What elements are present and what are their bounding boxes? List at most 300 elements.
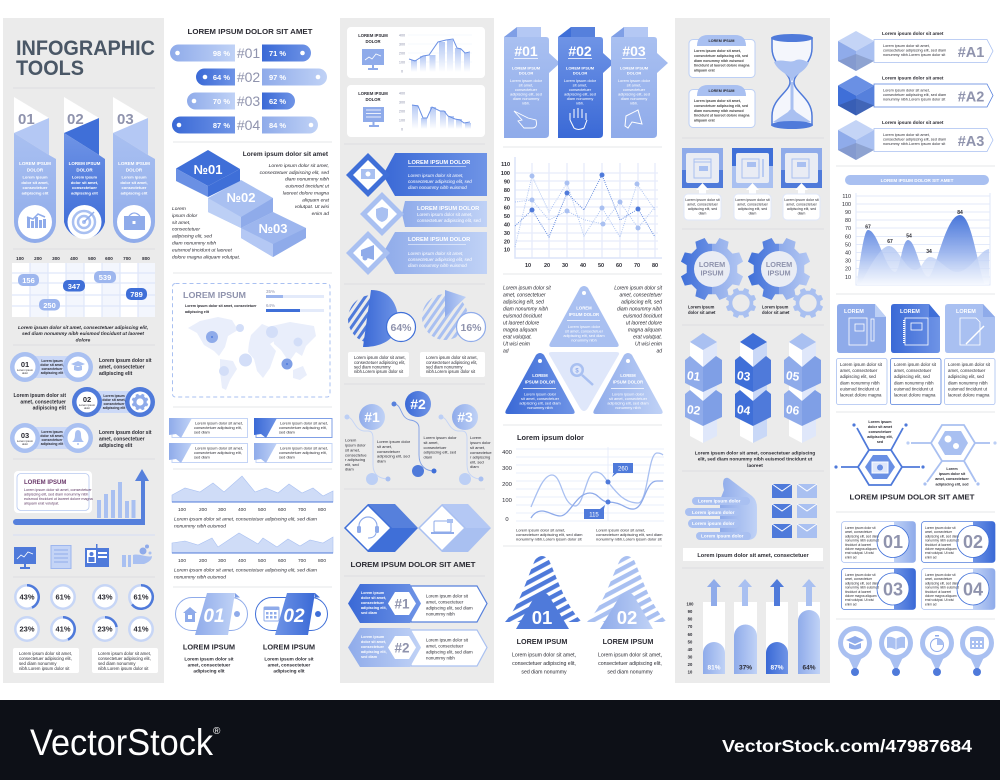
number card 01: enim ad — [845, 555, 857, 559]
panel: growth bar chart with note: adipiscing elit, sed diam nonummy nibh — [24, 492, 88, 496]
hand with list — [685, 478, 757, 540]
panel: numbered process rows: dolor — [84, 406, 90, 410]
panel: isometric steps: №01 — [194, 162, 222, 177]
panel: growth bar chart with note: Lorem ipsum dolor sit amet, consectetuer — [24, 488, 92, 492]
panel: isometric steps: euismod tincidunt ut laoreet — [172, 247, 232, 253]
ribbon card #03: adipiscing elit, sed — [618, 92, 650, 96]
striped peak 02: consectetuer adipiscing elit, — [598, 661, 662, 667]
flag card: Lorem ipsum dolor sit amet, — [195, 420, 243, 426]
line chart: curves: 115 — [589, 512, 599, 518]
panel: isometric steps: consectetuer adipiscing elit, sed — [260, 170, 329, 176]
panel: #1 #2 #3 connectors: ipsum dolor — [345, 442, 366, 448]
flag card: consectetuer adipiscing elit, — [194, 425, 242, 430]
tabbed note 1: consectetuer adipiscing elit, sed — [694, 54, 748, 58]
badge 02: adipiscing elit — [273, 668, 305, 674]
donut percent charts: 23% — [97, 624, 113, 634]
area chart 1: 800 — [318, 507, 326, 513]
file card 2 — [891, 304, 940, 353]
panel: triangle group: adipiscing elit, sed — [503, 300, 544, 306]
icon card with note 2: diam — [749, 212, 756, 216]
panel: line chart card 1: LOREM IPSUM — [358, 33, 388, 38]
panel: #1 #2 #3 connectors: consectetue — [470, 450, 492, 455]
ribbon card #01: nibh. — [522, 100, 530, 106]
banner 01 — [14, 97, 56, 243]
panel: triangle group: adipiscing elit, sed — [621, 300, 662, 306]
text box: adipiscing elit, sed — [894, 374, 930, 379]
line chart: curves — [502, 433, 664, 542]
cube row A1 — [838, 31, 993, 71]
number card 02: adipiscing elit, sed diam — [925, 534, 959, 538]
ribbon card #02: nibh. — [576, 100, 584, 106]
pie chart 16%: 16% — [460, 322, 482, 334]
chart: grid with value tags: 347 — [68, 282, 80, 291]
panel: #1 #2 #3 connectors: consectetuer — [424, 445, 447, 450]
banner 03: LOREM IPSUM — [118, 161, 150, 166]
stacked pillar 03-04: 04 — [736, 402, 752, 418]
panel: triangle group: sit amet, consectetuer — [565, 328, 604, 334]
panel: numbered process rows: 02 — [83, 395, 91, 404]
striped peak 01: Lorem ipsum dolor sit amet, — [512, 652, 576, 658]
dotted scatter chart: 100 — [501, 171, 510, 177]
panel: line chart card 1: 300 — [399, 42, 405, 46]
panel: triangle group: IPSUM DOLOR — [613, 380, 644, 384]
striped peak 02: sed diam nonummy — [607, 670, 653, 676]
banner 03: dolor sit amet, — [120, 180, 148, 185]
flag card — [169, 418, 248, 438]
panel: world map — [172, 284, 330, 397]
hexagon row #1: sed diam — [361, 611, 378, 615]
banner 01: Lorem ipsum — [22, 174, 48, 180]
area chart: overlapping peaks: 30 — [845, 258, 851, 264]
panel: triangle group: nonummy nibh — [615, 405, 641, 410]
panel: growth bar chart with note — [13, 469, 149, 525]
text card: sed diam nonummy — [426, 364, 463, 370]
panel: line chart card 1: 100 — [399, 60, 405, 64]
panel: triangle group: Lorem ipsum dolor — [568, 324, 600, 329]
panel: diamond list row 3: LOREM IPSUM DOLOR — [408, 237, 470, 243]
icon pin: book — [879, 626, 913, 676]
banner 01: adipiscing elit — [22, 190, 49, 196]
banner 02: DOLOR — [76, 168, 93, 172]
chart: grid with value tags: 100 — [16, 256, 24, 261]
badge 01: LOREM IPSUM — [183, 642, 235, 652]
area chart 2: 200 — [199, 558, 207, 564]
panel: triangle group: amet, consectetuer — [503, 292, 546, 298]
bar chart with arrows: 87% — [770, 664, 784, 672]
icon card with note 2 — [732, 148, 773, 220]
panel: numbered process rows: Lorem ipsum dolor sit — [99, 358, 152, 364]
cube row A1: Lorem ipsum dolor sit amet — [882, 31, 944, 36]
area chart 2: 800 — [318, 558, 326, 564]
ribbon card #02: consectetuer — [569, 87, 592, 92]
hand with list: Lorem ipsum dolor — [692, 510, 735, 515]
panel: numbered process rows: adipiscing elit — [99, 371, 133, 377]
hexagon node dark — [834, 420, 925, 485]
icon row: monitor, document, id card, hand — [14, 544, 152, 569]
hexagon row #1 — [348, 584, 487, 623]
area chart: overlapping peaks: 10 — [845, 275, 851, 281]
text card: sed diam nonummy — [98, 661, 136, 666]
cube row A2: nonummy nibh.Lorem ipsum dolor sit — [883, 98, 946, 102]
panel: numbered process rows: dolor sit amet, — [102, 398, 126, 402]
panel: triangle group: Lorem ipsum dolor — [524, 392, 556, 396]
caption: Lorem ipsum dolor sit amet, consectetuer adipiscing — [695, 452, 815, 456]
area chart: overlapping peaks: 67 — [865, 224, 871, 230]
flag card: sed diam — [279, 430, 295, 434]
ribbon card #03: DOLOR — [627, 70, 641, 76]
panel: numbered process rows: Lorem ipsum — [103, 394, 125, 398]
donut percent charts: 23% — [19, 624, 35, 634]
line chart: curves: 100 — [502, 498, 512, 504]
panel: world map: adipiscing elit — [185, 310, 210, 314]
hexagon node light: amet, consectetuer — [935, 477, 969, 481]
panel: isometric steps: ipsum dolor — [172, 213, 198, 219]
panel: isometric steps: №02 — [227, 190, 255, 205]
number card 04: enim ad — [925, 602, 937, 606]
caption: Lorem ipsum dolor sit amet, consectetuer adipiscing elit, — [18, 326, 148, 331]
panel: #1 #2 #3 connectors: ipsum dolor — [470, 440, 491, 445]
ribbon card #03: LOREM IPSUM — [620, 66, 648, 70]
area chart: overlapping peaks: 40 — [845, 250, 851, 256]
panel: growth bar chart with note: LOREM IPSUM — [24, 480, 66, 486]
panel: line chart card 2: 0 — [401, 128, 403, 132]
cube row A3: consectetuer adipiscing elit, sed diam — [883, 138, 946, 142]
heading: LOREM IPSUM DOLOR SIT AMET — [850, 492, 975, 502]
panel: isometric steps: enim ad — [312, 211, 329, 217]
panel: #1 #2 #3 connectors: elit, sed — [345, 462, 359, 467]
text box: euismod tincidunt ut — [894, 386, 934, 392]
tabbed note 2: aliquam erat — [694, 118, 715, 122]
line chart: curves: 300 — [502, 466, 512, 472]
text box: adipiscing elit, sed — [948, 374, 984, 379]
panel: double sided percent pills: 70 % — [213, 97, 230, 106]
flag card — [254, 443, 332, 463]
bar chart with arrows — [686, 579, 820, 674]
banner 02: LOREM IPSUM — [69, 161, 100, 166]
striped peak 02 — [587, 556, 667, 676]
panel: double sided percent pills — [170, 44, 327, 134]
area chart 1: 100 — [178, 507, 186, 513]
ribbon card #02: LOREM IPSUM — [566, 66, 594, 70]
panel: numbered process rows — [10, 352, 155, 453]
tabbed note 2: diam nonummy nibh euismod — [694, 109, 744, 113]
ribbon card #03: Lorem ipsum dolor — [618, 78, 650, 83]
panel: line chart card 2 — [347, 85, 485, 137]
bar chart with arrows: 60 — [688, 632, 693, 637]
ribbon card #02: DOLOR — [573, 70, 587, 76]
area chart 1: Lorem ipsum dolor sit amet, consectetuer adipiscing elit, sed diam — [174, 518, 317, 522]
number card 04: nonummy nibh euismod — [925, 586, 959, 590]
bar chart with arrows: 80 — [688, 616, 693, 622]
text card: sed diam nonummy — [19, 661, 57, 666]
hexagon node dark: consectetuer — [869, 430, 892, 434]
area chart 2 — [172, 533, 333, 580]
number card 04: amet, consectetuer — [925, 577, 953, 581]
panel: triangle group: Lorem ipsum dolor — [612, 392, 644, 396]
tabbed note 1: aliquam erat — [694, 68, 715, 72]
ribbon card #01: #01 — [514, 43, 538, 59]
chart: grid with value tags: 700 — [123, 256, 131, 261]
text box: laoreet dolore magna — [894, 392, 936, 398]
stacked pillar 05-06: 05 — [785, 368, 801, 384]
panel: triangle group: $ — [575, 368, 579, 374]
text box: diam nonummy nibh — [894, 380, 934, 386]
number card 03: dolore magna aliquam — [845, 594, 877, 598]
pill heading: LOREM IPSUM DOLOR SIT AMET — [881, 178, 954, 183]
panel: #1 #2 #3 connectors: diam — [424, 454, 433, 460]
cube row A3: nonummy nibh.Lorem ipsum dolor sit — [883, 142, 946, 146]
panel: isometric steps: consectetuer — [172, 227, 200, 233]
panel: numbered process rows: consectetuer — [41, 438, 63, 442]
cube row A2: Lorem ipsum dolor sit amet, — [883, 88, 930, 92]
dotted scatter chart: 40 — [580, 263, 586, 269]
panel: #1 #2 #3 connectors: sit amet, — [470, 445, 485, 450]
gears 2: IPSUM — [767, 268, 791, 278]
hexagon row #2: sed diam — [361, 655, 378, 659]
number card 04: adipiscing elit, sed diam — [925, 581, 959, 585]
flag card: Lorem ipsum dolor sit amet, — [280, 446, 328, 450]
area chart: overlapping peaks: 60 — [845, 234, 851, 240]
hexagon node dark: Lorem ipsum — [868, 420, 892, 424]
ribbon card #01: DOLOR — [519, 70, 533, 76]
text box — [944, 358, 995, 404]
area chart: overlapping peaks: 84 — [957, 210, 963, 216]
text card: consectetuer adipiscing elit, — [354, 360, 405, 365]
panel: world map: LOREM IPSUM — [183, 290, 246, 300]
line chart: curves: 200 — [502, 482, 512, 488]
panel: triangle group: IPSUM DOLOR — [569, 312, 600, 317]
dotted scatter chart: 40 — [504, 222, 510, 228]
panel: triangle group: Ut wisi enim — [635, 342, 662, 348]
line chart: curves: Lorem ipsum dolor sit amet, — [516, 528, 565, 532]
panel: #1 #2 #3 connectors: sit amet, — [424, 440, 439, 445]
number card 02: dolore magna aliquam — [925, 547, 957, 551]
ribbon card #01: adipiscing elit, sed — [510, 92, 542, 96]
bar chart with arrows: 64% — [802, 664, 816, 672]
ribbon card #03: consectetuer — [623, 87, 646, 92]
panel: double sided percent pills: #04 — [237, 117, 260, 133]
cube row A2 — [838, 76, 993, 116]
text box: diam nonummy nibh — [840, 380, 880, 386]
chart: grid with value tags: 300 — [52, 256, 60, 261]
flag card: consectetuer adipiscing elit, — [279, 450, 327, 455]
panel: triangle group: ad — [656, 348, 662, 354]
banner 02: adipiscing elit — [71, 190, 99, 196]
panel: #1 #2 #3 connectors: adipiscing elit, sed — [377, 454, 410, 458]
donut percent charts: 43% — [97, 592, 113, 602]
banner 03: DOLOR — [126, 168, 143, 172]
text card: Lorem ipsum dolor sit amet, — [98, 651, 151, 656]
panel: triangle group: amet, consectetuer — [619, 292, 662, 298]
panel: diamond list row 3 — [346, 231, 487, 275]
text box: euismod tincidunt ut — [840, 386, 880, 392]
dotted scatter chart: 60 — [504, 206, 510, 212]
hexagon row #2: adipiscing elit, sed diam — [426, 650, 473, 654]
area chart: overlapping peaks: 50 — [845, 242, 851, 248]
panel: triangle group: LOREM — [576, 306, 592, 310]
panel: triangle group: IPSUM DOLOR — [525, 380, 556, 384]
panel: growth bar chart with note: aliquam erat volutpat. — [24, 502, 59, 506]
striped peak 01: consectetuer adipiscing elit, — [512, 661, 576, 667]
banner 01: LOREM IPSUM — [19, 161, 51, 166]
ribbon card #02 — [558, 27, 614, 138]
number card 04 — [922, 568, 995, 610]
area chart 1: nonummy nibh euismod — [174, 524, 226, 530]
stacked pillar 05-06 — [784, 333, 821, 443]
panel: growth bar chart with note: euismod tincidunt ut laoreet dolore magna — [24, 497, 94, 501]
ribbon card #01: sit amet, — [519, 82, 533, 88]
panel: double sided percent pills: 64 % — [213, 73, 230, 82]
file card 1: LOREM — [844, 309, 864, 315]
panel: diamond list row 3: Lorem ipsum dolor sit amet, — [408, 251, 464, 256]
panel: isometric steps: dolore magna aliquam volutpat. — [172, 254, 240, 260]
panel: line chart card 1: 400 — [399, 34, 405, 38]
badge 02: amet, consectetuer — [268, 662, 311, 668]
chart: grid with value tags — [12, 256, 155, 317]
bar chart with arrows: 81% — [707, 664, 721, 672]
footer band: VectorStock — [30, 722, 213, 763]
dotted scatter chart: 80 — [504, 188, 510, 194]
ribbon card #02: #02 — [568, 43, 592, 59]
hexagon row #2: Lorem ipsum dolor sit — [426, 638, 468, 642]
tabbed note 2: tincidunt ut laoreet dolore magna — [694, 114, 749, 118]
bar chart with arrows: 20 — [688, 662, 693, 667]
panel: isometric steps: sit amet, — [172, 220, 190, 226]
hexagon row #1: adipiscing elit, sed diam — [426, 606, 473, 610]
donut percent charts: 61% — [133, 592, 149, 602]
panel: diamond list row 2 — [360, 192, 487, 236]
panel: isometric steps: aliquam erat — [302, 197, 330, 203]
pie chart 64%: 64% — [390, 322, 412, 334]
badge 02: 02 — [283, 606, 305, 627]
area chart 2: 600 — [278, 558, 286, 564]
number card 03: nonummy nibh euismod — [845, 586, 879, 590]
ribbon card #02: Lorem ipsum dolor — [564, 78, 596, 83]
hexagon row #1: amet, consectetuer — [426, 600, 464, 604]
panel: line chart card 2: DOLOR — [365, 97, 381, 102]
hand with list: Lorem ipsum dolor — [701, 534, 744, 539]
panel: diamond list row 1: consectetuer adipiscing elit, sed — [408, 179, 472, 184]
cube row A3: Lorem ipsum dolor sit amet, — [883, 133, 930, 137]
text box — [890, 358, 941, 404]
donut percent charts: 41% — [55, 624, 71, 634]
panel: double sided percent pills: 97 % — [269, 73, 286, 82]
banner 03 — [113, 97, 155, 243]
cube row A1: nonummy nibh.Lorem ipsum dolor sit — [883, 53, 946, 57]
panel: double sided percent pills: 84 % — [269, 121, 286, 130]
area chart 2: 700 — [298, 558, 306, 564]
badge 01: adipiscing elit — [193, 668, 225, 674]
panel: line chart card 2: 300 — [399, 100, 405, 104]
panel: double sided percent pills: 87 % — [213, 121, 230, 130]
footer band: ® — [213, 726, 221, 737]
panel: world map: Lorem ipsum dolor sit amet, consectetuer — [185, 304, 256, 308]
panel: numbered process rows: consectetuer — [41, 367, 63, 371]
dotted scatter chart: 80 — [652, 263, 658, 269]
dotted scatter chart: 70 — [504, 197, 510, 203]
hexagon row #1: Lorem ipsum dolor sit — [426, 594, 468, 598]
cube row A2: Lorem ipsum dolor sit amet — [882, 76, 944, 80]
ribbon card #03: diam nonummy — [621, 96, 647, 101]
panel: numbered process rows: adipiscing elit — [33, 406, 66, 412]
text box: euismod tincidunt ut — [948, 386, 988, 392]
dotted scatter chart: 50 — [598, 263, 604, 269]
ribbon card #02: diam nonummy — [567, 96, 593, 101]
chart: grid with value tags: 400 — [70, 256, 78, 261]
banner 03: adipiscing elit — [121, 190, 148, 196]
number card 01: dolore magna aliquam — [845, 547, 877, 551]
text card: Lorem ipsum dolor sit amet, — [19, 651, 72, 656]
badge 01: 01 — [203, 606, 225, 627]
ribbon card #02: adipiscing elit, sed — [564, 92, 596, 96]
caption: sed diam nonummy nibh euismod tincidunt ut laoreet — [22, 331, 144, 337]
number card 02: tincidunt ut laoreet — [925, 543, 951, 547]
panel: diamond list row 1: diam nonummy nibh euismod — [408, 185, 467, 190]
panel: numbered process rows: 01 — [21, 360, 29, 369]
panel: triangle group: diam nonummy nibh — [503, 306, 548, 312]
ribbon card #03: nibh. — [630, 100, 638, 106]
area chart 2: 300 — [218, 558, 226, 564]
number card 03: tincidunt ut laoreet — [845, 590, 871, 594]
ribbon card #03 — [611, 27, 668, 138]
area chart 1: 400 — [238, 507, 246, 513]
bar chart with arrows: 40 — [688, 647, 693, 652]
text card — [13, 648, 79, 673]
donut percent charts: 41% — [133, 624, 149, 634]
number card 03 — [842, 568, 916, 610]
heading: column 2: LOREM IPSUM DOLOR SIT AMET — [188, 27, 313, 36]
line chart: curves: nonummy nibh.Lorem ipsum dolor sit — [596, 536, 662, 542]
panel: line chart card 1: 0 — [401, 70, 403, 74]
text card: nibh.Lorem ipsum dolor sit — [19, 666, 70, 671]
panel: isometric steps: diam nonummy nibh — [172, 240, 216, 246]
number card 03: adipiscing elit, sed diam — [845, 581, 879, 585]
banner 02: consectetuer — [72, 185, 97, 190]
panel: triangle group: adipiscing elit, sed diam — [563, 333, 605, 338]
banner 03: 03 — [117, 111, 134, 128]
panel: line chart card 1: DOLOR — [365, 39, 381, 44]
number card 01 — [842, 522, 916, 562]
panel: line chart card 2: 200 — [399, 110, 405, 114]
dotted scatter chart: 30 — [504, 231, 510, 237]
icon card with note 2: amet, consectetuer — [737, 202, 769, 206]
text card: consectetuer adipiscing elit, — [19, 656, 72, 661]
gears 1: LOREM — [699, 260, 725, 269]
panel: isometric steps: diam nonummy nibh — [285, 177, 329, 183]
panel: #1 #2 #3 connectors: r adipiscing — [470, 454, 490, 460]
panel: triangle group: sit amet, consectetuer — [521, 396, 560, 401]
panel: numbered process rows: Lorem ipsum — [17, 439, 33, 443]
icon card with note 3: adipiscing elit, sed — [787, 207, 816, 211]
area chart 1: 600 — [278, 507, 286, 513]
panel: line chart card 1: 200 — [399, 52, 405, 56]
panel: #1 #2 #3 connectors: #3 — [457, 409, 473, 425]
text box: Lorem ipsum dolor sit — [840, 362, 882, 367]
panel: #1 #2 #3 connectors: r adipiscing — [345, 457, 365, 462]
banner 01: DOLOR — [27, 168, 44, 172]
chart: grid with value tags: 600 — [105, 256, 113, 261]
number card 01: erat volutpat. Ut wisi — [845, 551, 874, 555]
text box: diam nonummy nibh — [948, 380, 988, 386]
panel: line chart card 2: 100 — [399, 118, 405, 122]
file card 1 — [837, 304, 886, 353]
hexagon row #1: nonummy nibh — [426, 612, 455, 616]
text box: amet, consectetuer — [840, 368, 878, 373]
area chart 2: 500 — [258, 558, 266, 564]
hexagon row #2: adipiscing elit, — [361, 650, 387, 654]
panel: double sided percent pills: #01 — [237, 45, 260, 61]
panel: numbered ribbon banners — [14, 97, 155, 243]
